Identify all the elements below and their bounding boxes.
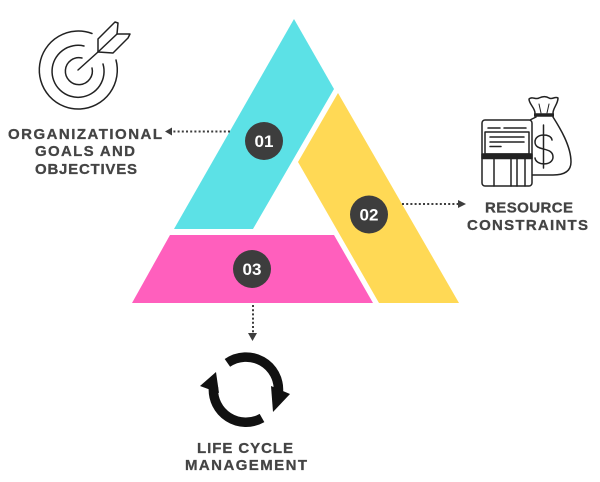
- label: resource constraints: [467, 200, 588, 234]
- arrow: 01 to organizational goals: [165, 128, 230, 136]
- badge 02: 02: [360, 206, 378, 224]
- label: life cycle management: LIFE CYCLE: [197, 440, 293, 457]
- badge 01: 01: [255, 132, 273, 151]
- arrow: 03 to life cycle management: [248, 305, 257, 341]
- badge 03: [233, 250, 271, 288]
- segment 03: pink: [132, 235, 373, 303]
- money bag: [528, 96, 571, 175]
- icon: target with arrow: [39, 22, 130, 109]
- segment 01: cyan: [174, 19, 334, 229]
- label: resource constraints: RESOURCE: [485, 200, 573, 216]
- label: resource constraints: CONSTRAINTS: [467, 217, 588, 234]
- label: organizational goals and objectives: ORGANIZATIONAL: [8, 126, 162, 143]
- label: organizational goals and objectives: OBJECTIVES: [35, 161, 137, 178]
- label: life cycle management: [185, 440, 307, 474]
- icon: life cycle arrows: [200, 357, 290, 422]
- budget sheet: [482, 120, 532, 186]
- label: life cycle management: MANAGEMENT: [185, 457, 307, 474]
- label: organizational goals and objectives: [8, 126, 162, 178]
- label: organizational goals and objectives: GOALS AND: [35, 143, 135, 160]
- badge 01: [245, 122, 283, 160]
- badge 02: [350, 196, 388, 234]
- panel: triangle diagram: [132, 19, 459, 303]
- arrow: 02 to resource constraints: [402, 200, 466, 208]
- icon: budget sheet and money bag: [482, 96, 571, 186]
- badge 03: 03: [243, 260, 261, 279]
- segment 02: yellow: [298, 93, 459, 303]
